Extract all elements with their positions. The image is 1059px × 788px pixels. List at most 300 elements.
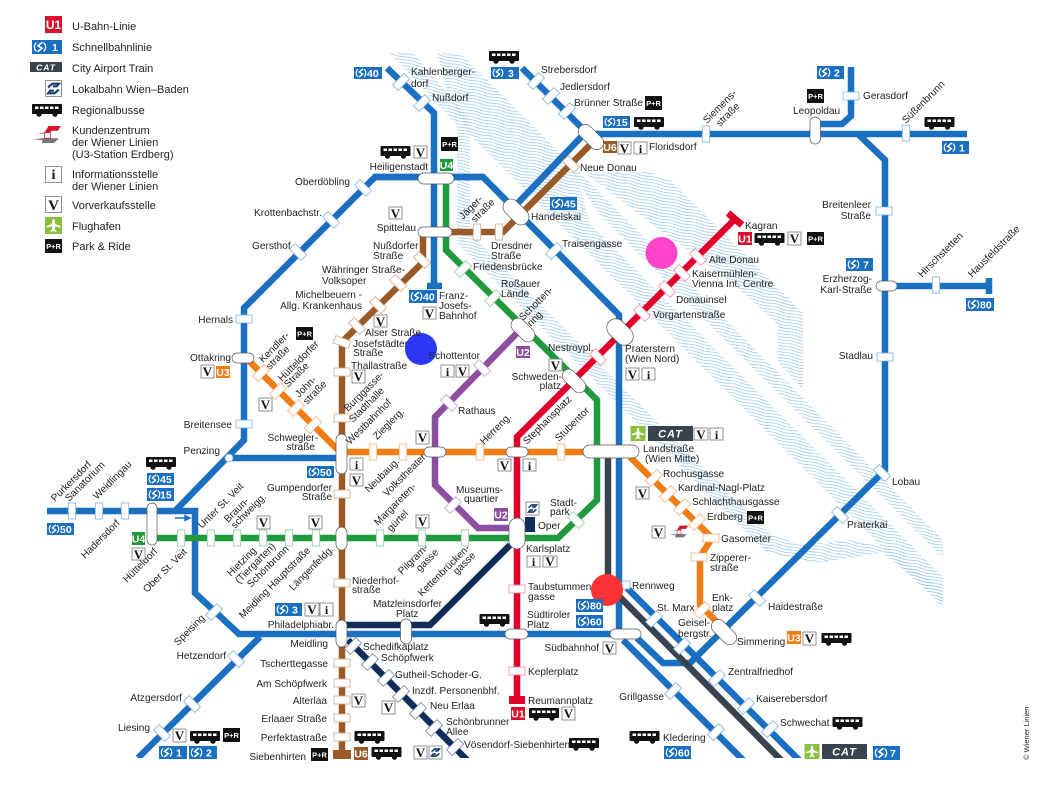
- station labels: horizontal: Floridsdorf: [649, 142, 697, 153]
- U6 Siebenhirten end bar: [333, 750, 351, 759]
- station label: Roßauer Lände: Lände: [501, 289, 529, 300]
- station labels: horizontal: Strebersdorf: [541, 65, 597, 76]
- highlight circle: blue: [405, 333, 437, 365]
- station labels: horizontal: Rennweg: [632, 581, 675, 592]
- station labels: diagonal: Hietzing: [225, 546, 259, 579]
- station labels: diagonal: Stadthalle: [347, 385, 387, 425]
- icons: S-Bahn badges: 3: [508, 68, 514, 80]
- station labels: horizontal: Leopoldau: [793, 106, 840, 117]
- station labels: horizontal: Atzgersdorf: [130, 693, 182, 704]
- icons: V ticket sales points: V: [805, 631, 815, 646]
- station labels: horizontal: Straße: [373, 251, 404, 262]
- station labels: diagonal: Burggasse-: [342, 370, 387, 414]
- icons: V ticket sales points: V: [418, 430, 428, 445]
- station labels: horizontal: Siebenhirten: [249, 752, 306, 763]
- station labels: diagonal: Süßenbrunn: [900, 79, 947, 126]
- station labels: diagonal: Pilgram-: [396, 543, 431, 577]
- station labels: horizontal: Zipperer-: [710, 553, 751, 564]
- station labels: horizontal: Thallastraße: [351, 361, 407, 372]
- station labels: horizontal: Kahlenberger-: [411, 67, 475, 78]
- icons: information points: i: [446, 365, 450, 379]
- icon: airport and CAT at the south edge: CAT: [832, 746, 857, 758]
- icon: airport and CAT at the south edge: [804, 744, 867, 759]
- station labels: diagonal: [49, 79, 1023, 648]
- icon: customer centre: [33, 126, 61, 143]
- icons: U-Bahn badges: U4: [132, 534, 145, 546]
- legend text: Informationsstelle: Informationsstelle: [72, 169, 158, 181]
- station labels: horizontal: Platz: [396, 609, 418, 620]
- station labels: horizontal: Simmering: [737, 637, 785, 648]
- icon: information: [46, 166, 62, 183]
- icons: U-Bahn badges: U6: [603, 142, 617, 154]
- stations: U4 stops: [177, 261, 584, 546]
- legend: [30, 16, 189, 253]
- station labels: horizontal: Rochusgasse: [663, 469, 725, 480]
- station labels: horizontal: Straße: [302, 492, 332, 503]
- copyright note: © Wiener Linien: [1022, 707, 1031, 760]
- icons: V ticket sales points: V: [352, 473, 362, 488]
- stations: U6 stops: [333, 156, 579, 741]
- station labels: horizontal: [118, 65, 920, 763]
- highlight circle: red: [591, 574, 623, 606]
- station labels: horizontal: Gutheil-Schoder-G.: [395, 670, 482, 681]
- icons: V ticket sales points: V: [620, 141, 630, 156]
- icons: park and ride: P+R: [808, 92, 823, 101]
- station labels: horizontal: Am Schöpfwerk: [256, 679, 328, 690]
- interchange stations: [147, 117, 897, 648]
- icons: park and ride: P+R: [808, 234, 823, 244]
- icons: U-Bahn badges: U3: [787, 632, 801, 644]
- station labels: diagonal: Purkersdorf: [49, 459, 94, 504]
- icons: S-Bahn badges: 80: [590, 600, 602, 612]
- station labels: horizontal: Stadt-: [550, 498, 577, 509]
- icons: information points: i: [528, 459, 532, 473]
- station labels: horizontal: Reumannplatz: [528, 696, 593, 707]
- icons: S-Bahn badges: 40: [423, 292, 435, 304]
- icon: park and ride: P+R: [46, 242, 61, 251]
- station labels: horizontal: Franz-: [439, 291, 468, 302]
- station labels: diagonal: straße: [469, 197, 498, 225]
- U6 brown line: [342, 143, 592, 752]
- icons: U-Bahn badges: U1: [511, 708, 525, 720]
- icons: park and ride: P+R: [297, 330, 312, 338]
- station labels: horizontal: Zentralfriedhof: [728, 667, 793, 678]
- station labels: horizontal: straße: [286, 442, 315, 453]
- icons: park and ride: P+R: [312, 750, 327, 760]
- station label: Roßauer Lände: Roßauer: [501, 279, 541, 290]
- stations: U3 stops: [253, 365, 719, 618]
- station labels: horizontal: Vienna Int. Centre: [692, 279, 774, 290]
- station labels: horizontal: Jedlersdorf: [560, 82, 610, 93]
- icons: V ticket sales points: V: [134, 547, 144, 562]
- icon: Lokalbahn at Vösendorf: [429, 746, 442, 759]
- icon: S1 badge: 1: [52, 42, 58, 54]
- station labels: horizontal: (Wien Nord): [625, 354, 679, 365]
- legend text: Informationsstelle: der Wiener Linien: [72, 181, 158, 193]
- icons: S-Bahn badges: 2: [206, 748, 212, 760]
- icons: S-Bahn badges: [47, 66, 994, 760]
- station labels: diagonal: Weidlingau: [91, 459, 134, 502]
- station labels: diagonal: Ober St. Veit: [141, 547, 190, 595]
- station labels: horizontal: Keplerplatz: [528, 667, 578, 678]
- station labels: diagonal: Zieglerg.: [371, 407, 407, 442]
- icons: V ticket sales points: V: [376, 314, 386, 329]
- icons: V ticket sales points: V: [696, 427, 706, 442]
- station labels: diagonal: straße: [264, 344, 293, 372]
- station labels: horizontal: Erzherzog-: [823, 274, 872, 285]
- station labels: diagonal: Margareten-: [372, 481, 419, 528]
- station labels: diagonal: Stephansplatz: [521, 394, 574, 447]
- station labels: diagonal: Kendler-: [257, 330, 292, 365]
- water: Danube and canal hatching: [390, 53, 943, 608]
- station labels: horizontal: Alte Donau: [709, 255, 759, 266]
- icon: Lokalbahn: [46, 80, 62, 96]
- station labels: horizontal: Praterkai: [847, 520, 887, 531]
- icons: U-Bahn badges: U4: [440, 160, 453, 172]
- icons: information points: i: [639, 142, 643, 156]
- icons: V ticket sales points: V: [551, 358, 561, 373]
- station labels: diagonal: Hadersdorf: [79, 518, 123, 561]
- station labels: horizontal: Praterstern: [625, 344, 675, 355]
- icons: U-Bahn badges: U3: [216, 367, 230, 379]
- icons: V ticket sales points: V: [654, 525, 664, 540]
- station labels: diagonal: straße: [714, 101, 743, 129]
- station labels: horizontal: Schedifkaplatz: [363, 642, 429, 653]
- station labels: diagonal: Neubaug.: [363, 456, 402, 495]
- station labels: horizontal: Straße: [353, 348, 384, 359]
- station labels: horizontal: Breitensee: [184, 420, 232, 431]
- stations: U1 stops: [509, 249, 706, 675]
- station labels: horizontal: Oper: [538, 521, 561, 532]
- icons: V ticket sales points: V: [203, 364, 213, 379]
- station labels: diagonal: Sanatorium: [63, 460, 108, 504]
- station label: Dresdner Straße: Straße: [491, 251, 522, 262]
- station labels: diagonal: gasse: [414, 547, 441, 574]
- icons: V ticket sales points: [132, 141, 816, 760]
- station labels: diagonal: straße: [301, 379, 330, 407]
- station labels: horizontal: Matzleinsdorfer: [373, 599, 443, 610]
- station labels: horizontal: Währinger Straße-: [322, 265, 405, 276]
- station labels: horizontal: Schottentor: [428, 351, 481, 362]
- station labels: horizontal: Penzing: [184, 446, 220, 457]
- station labels: horizontal: Kagran: [745, 221, 778, 232]
- station labels: horizontal: park: [550, 507, 571, 518]
- icons: S-Bahn badges: 80: [980, 300, 992, 312]
- station labels: horizontal: Niederhof-: [352, 576, 399, 587]
- icons: S-Bahn badges: 3: [292, 604, 298, 616]
- station labels: horizontal: Alser Straße: [365, 328, 421, 339]
- icons: park and ride: P+R: [442, 140, 457, 149]
- icons: V ticket sales points: V: [416, 745, 426, 760]
- icons: V ticket sales points: V: [416, 145, 426, 160]
- station labels: horizontal: Schwegler-: [268, 433, 318, 444]
- Lokalbahn south branch: [348, 640, 468, 761]
- station labels: horizontal: Allee: [446, 727, 469, 738]
- station labels: horizontal: Schlachthausgasse: [692, 497, 780, 508]
- station labels: horizontal: Traisengasse: [562, 239, 623, 250]
- icons: V ticket sales points: V: [564, 706, 574, 721]
- station labels: horizontal: platz: [540, 381, 561, 392]
- station labels: horizontal: Gumpendorfer: [267, 483, 333, 494]
- icons: V ticket sales points: V: [307, 602, 317, 617]
- station labels: horizontal: Taubstummen: [528, 582, 591, 593]
- icon: Lokalbahn at Oper: [526, 502, 539, 515]
- station labels: horizontal: Michelbeuern -: [295, 290, 362, 301]
- station labels: diagonal: Herreng.: [478, 412, 514, 447]
- U1 red line: [517, 219, 735, 700]
- icons: V ticket sales points: V: [500, 458, 510, 473]
- station labels: horizontal: quartier: [464, 494, 499, 505]
- legend text: Kundenzentrum: der Wiener Linien: [72, 137, 158, 149]
- icons: information points: i: [647, 368, 651, 382]
- icon: CAT badge: [30, 62, 62, 72]
- icons: V ticket sales points: V: [259, 515, 269, 530]
- station labels: diagonal: ring: [525, 309, 545, 329]
- icon: V ticket sales: V: [48, 198, 59, 214]
- station labels: diagonal: Siemens-: [701, 88, 739, 126]
- station labels: horizontal: Josefstädter: [353, 339, 409, 350]
- station labels: horizontal: Straße: [841, 211, 871, 222]
- legend text: Kundenzentrum: Kundenzentrum: [72, 125, 150, 137]
- station labels: horizontal: Spittelau: [377, 223, 416, 234]
- icons: information points: i: [532, 555, 536, 569]
- icon: airport and CAT at Landstraße: CAT: [658, 428, 683, 440]
- legend text: Kundenzentrum: (U3-Station Erdberg): [72, 149, 174, 161]
- station labels: diagonal: John-: [293, 374, 319, 400]
- icons: V ticket sales points: V: [458, 364, 468, 379]
- station labels: horizontal: (Wien Mitte): [645, 454, 699, 465]
- station labels: horizontal: Gasometer: [721, 534, 772, 545]
- icons: information points: i: [355, 458, 359, 472]
- station labels: horizontal: Erlaaer Straße: [261, 714, 327, 725]
- icons: S-Bahn badges: 45: [564, 198, 576, 210]
- icons: S-Bahn badges: 50: [320, 467, 332, 479]
- legend text: Flughafen: Flughafen: [72, 221, 121, 233]
- station labels: diagonal: Hirschstetten: [916, 231, 966, 280]
- icon: U1 badge: U1: [46, 18, 61, 32]
- icons: V ticket sales points: V: [425, 306, 435, 321]
- station labels: horizontal: Josefs-: [439, 301, 472, 312]
- station labels: horizontal: Vorgartenstraße: [653, 310, 726, 321]
- Lokalbahn navy line: [345, 545, 510, 625]
- icon: V ticket sales: [46, 196, 62, 214]
- station labels: diagonal: Längenfeldg.: [287, 544, 336, 593]
- station labels: horizontal: Südbahnhof: [545, 643, 599, 654]
- station labels: horizontal: straße: [710, 563, 739, 574]
- icons: V ticket sales points: V: [605, 641, 615, 656]
- station labels: horizontal: Stadlau: [839, 351, 873, 362]
- icons: park and ride: P+R: [646, 99, 661, 108]
- stations: S-Bahn stops: [68, 73, 940, 741]
- station labels: horizontal: Volksoper: [322, 276, 367, 287]
- station labels: horizontal: Neu Erlaa: [430, 701, 475, 712]
- station labels: horizontal: Haidestraße: [768, 602, 823, 613]
- station labels: horizontal: Enk-: [712, 593, 733, 604]
- station labels: diagonal: gasse: [451, 550, 478, 577]
- station labels: diagonal: Unter St. Veit: [196, 481, 246, 531]
- icons: V ticket sales points: V: [354, 693, 364, 708]
- station labels: horizontal: Hetzendorf: [177, 651, 226, 662]
- stations: U2 stops: [441, 360, 490, 513]
- icon: customer centre at Erdberg: [669, 526, 688, 537]
- icons: park and ride: [223, 89, 824, 761]
- icons: U-Bahn badges: U2: [494, 510, 508, 522]
- icons: S-Bahn badges: 45: [160, 474, 172, 486]
- station labels: horizontal: Platz: [527, 620, 549, 631]
- U1 Kagran end bar: [728, 213, 742, 225]
- icons: park and ride: P+R: [224, 731, 239, 740]
- legend text: Regionalbusse: Regionalbusse: [72, 105, 145, 117]
- station labels: horizontal: Breitenleer: [822, 200, 872, 211]
- icons: V ticket sales points: V: [790, 231, 800, 246]
- icons: V ticket sales points: V: [384, 700, 394, 715]
- station labels: horizontal: Oberdöbling: [295, 177, 350, 188]
- station labels: horizontal: Landstraße: [643, 444, 694, 455]
- icon: information: i: [52, 168, 56, 183]
- station labels: diagonal: gürtel: [385, 508, 411, 534]
- station labels: diagonal: Hausfeldstraße: [966, 224, 1023, 280]
- station labels: horizontal: Alterlaa: [293, 696, 327, 707]
- station labels: horizontal: Nestroypl.: [548, 343, 593, 354]
- station labels: horizontal: Nußdorfer: [373, 241, 419, 252]
- station labels: horizontal: Perfektastraße: [261, 733, 327, 744]
- U1 Reumannplatz end bar: [509, 696, 525, 704]
- station labels: horizontal: Grillgasse: [619, 692, 664, 703]
- station labels: horizontal: Hernals: [198, 315, 233, 326]
- station labels: horizontal: Philadelphiabr.: [268, 620, 334, 631]
- station labels: horizontal: Vösendorf-Siebenhirten: [464, 740, 570, 751]
- icons: V ticket sales points: V: [354, 369, 364, 384]
- icons: V ticket sales points: V: [311, 515, 321, 530]
- station labels: horizontal: Museums-: [456, 485, 503, 496]
- icons: S-Bahn badges: 40: [367, 68, 379, 80]
- station labels: horizontal: Donauinsel: [676, 295, 727, 306]
- S-Bahn line network: [47, 67, 989, 761]
- icons: U-Bahn badges: [132, 141, 801, 760]
- station labels: horizontal: gasse: [528, 592, 555, 603]
- station labels: horizontal: dorf: [411, 79, 429, 90]
- station labels: diagonal: Schotten-: [517, 285, 556, 323]
- station labels: horizontal: Nußdorf: [432, 93, 469, 104]
- station labels: horizontal: Kaisermühlen-: [692, 269, 757, 280]
- station labels: diagonal: Speising: [172, 613, 208, 648]
- icons: V ticket sales points: V: [175, 728, 185, 743]
- station label: Dresdner Straße: Dresdner: [491, 241, 533, 252]
- station labels: horizontal: Erdberg: [707, 512, 743, 523]
- legend text: Schnellbahnlinie: Schnellbahnlinie: [72, 42, 152, 54]
- station labels: horizontal: Liesing: [118, 723, 150, 734]
- station labels: horizontal: St. Marx: [657, 603, 695, 614]
- icons: S-Bahn badges: 15: [160, 490, 172, 502]
- icons: V ticket sales points: V: [261, 397, 271, 412]
- legend text: Lokalbahn: Lokalbahn Wien–Baden: [72, 84, 189, 96]
- station labels: horizontal: Karl-Straße: [820, 285, 872, 296]
- icon: regional bus: [32, 104, 62, 117]
- arrow: S-Bahn direction: [175, 516, 190, 520]
- icons: S-Bahn badges: 50: [60, 524, 72, 536]
- icons: V ticket sales points: V: [638, 486, 648, 501]
- icons: S-Bahn badges: 60: [590, 616, 602, 628]
- icons: information points: [320, 142, 723, 617]
- station labels: horizontal: Inzdf. Personenbhf.: [412, 686, 500, 697]
- legend text: Vorverkaufsstelle: Vorverkaufsstelle: [72, 200, 156, 212]
- icons: information points: i: [715, 428, 719, 442]
- icons: S-Bahn badges: 60: [678, 748, 690, 760]
- station labels: diagonal: schweigg.: [229, 492, 269, 531]
- station labels: horizontal: Gerasdorf: [863, 91, 908, 102]
- station labels: horizontal: Tscherttegasse: [260, 659, 328, 670]
- stations: Lokalbahn stops: [345, 638, 463, 755]
- U4 green line: [157, 180, 597, 538]
- station labels: horizontal: Kaiserebersdorf: [756, 694, 827, 705]
- station labels: diagonal: Schönbrunn: [245, 544, 292, 590]
- station labels: horizontal: Schweden-: [512, 372, 562, 383]
- station labels: diagonal: Meidling Hauptstraße: [237, 545, 313, 621]
- icon: airport and CAT at Landstraße: [630, 426, 693, 441]
- icons: S-Bahn badges: 7: [863, 260, 869, 272]
- station labels: horizontal: Geisel-: [678, 618, 710, 629]
- station labels: diagonal: Braun-: [222, 496, 252, 525]
- icons: U-Bahn badges: U6: [354, 748, 368, 760]
- icons: U-Bahn badges: U2: [516, 347, 530, 359]
- station labels: diagonal: (Tiergarten): [233, 541, 278, 586]
- station labels: horizontal: Gersthof: [252, 241, 291, 252]
- icons: S-Bahn badges: 1: [959, 142, 965, 154]
- U3 orange line: [248, 360, 725, 630]
- icons: S-Bahn badges: 15: [616, 117, 628, 129]
- icon: S1 badge: [32, 40, 62, 54]
- station labels: horizontal: Heiligenstadt: [370, 162, 428, 173]
- icons: information points: i: [325, 603, 329, 617]
- icons: S-Bahn badges: 1: [176, 748, 182, 760]
- station labels: diagonal: Hütteldorfer: [276, 339, 322, 384]
- station labels: horizontal: Kardinal-Nagl-Platz: [678, 483, 765, 494]
- station labels: horizontal: Schöpfwerk: [381, 653, 435, 664]
- icons: S-Bahn badges: 2: [834, 68, 840, 80]
- legend text: U-Bahn-Linie: U-Bahn-Linie: [72, 21, 136, 33]
- station labels: diagonal: Volkstheater: [381, 452, 429, 499]
- icon: CAT badge: CAT: [36, 62, 56, 72]
- legend text: Park & Ride: Park & Ride: [72, 241, 131, 253]
- legend text: City Airport Train: City Airport Train: [72, 63, 153, 75]
- station labels: horizontal: Ottakring: [190, 353, 231, 364]
- station labels: diagonal: Jäger-: [457, 194, 485, 222]
- icons: park and ride: P+R: [748, 514, 763, 522]
- station label: Friedensbrücke: Friedensbrücke: [473, 262, 543, 273]
- station labels: horizontal: Rathaus: [458, 406, 496, 417]
- station labels: horizontal: Kledering: [663, 733, 706, 744]
- icons: U-Bahn badges: U1: [738, 234, 752, 246]
- highlight circle: magenta: [646, 237, 678, 269]
- station labels: horizontal: Allg. Krankenhaus: [280, 301, 362, 312]
- icons: V ticket sales points: V: [418, 514, 428, 529]
- Lokalbahn Oper stub: [525, 517, 535, 532]
- City Airport Train line: [608, 452, 782, 761]
- station labels: diagonal: Hütteldorf: [121, 546, 160, 585]
- station labels: horizontal: Krottenbachstr.: [254, 208, 322, 219]
- station labels: diagonal: Straße: [282, 361, 312, 390]
- station labels: horizontal: Schwechat: [780, 718, 830, 729]
- station labels: diagonal: Stubentor: [553, 405, 593, 444]
- icons: V ticket sales points: V: [391, 206, 401, 221]
- station labels: horizontal: Neue Donau: [580, 163, 637, 174]
- station labels: horizontal: Meidling: [290, 639, 328, 650]
- station labels: horizontal: Bahnhof: [439, 311, 477, 322]
- icons: S-Bahn badges: 7: [890, 748, 896, 760]
- station labels: diagonal: Kettenbrücken-: [416, 543, 473, 599]
- station labels: horizontal: Karlsplatz: [526, 544, 570, 555]
- icon: park and ride: [45, 239, 62, 253]
